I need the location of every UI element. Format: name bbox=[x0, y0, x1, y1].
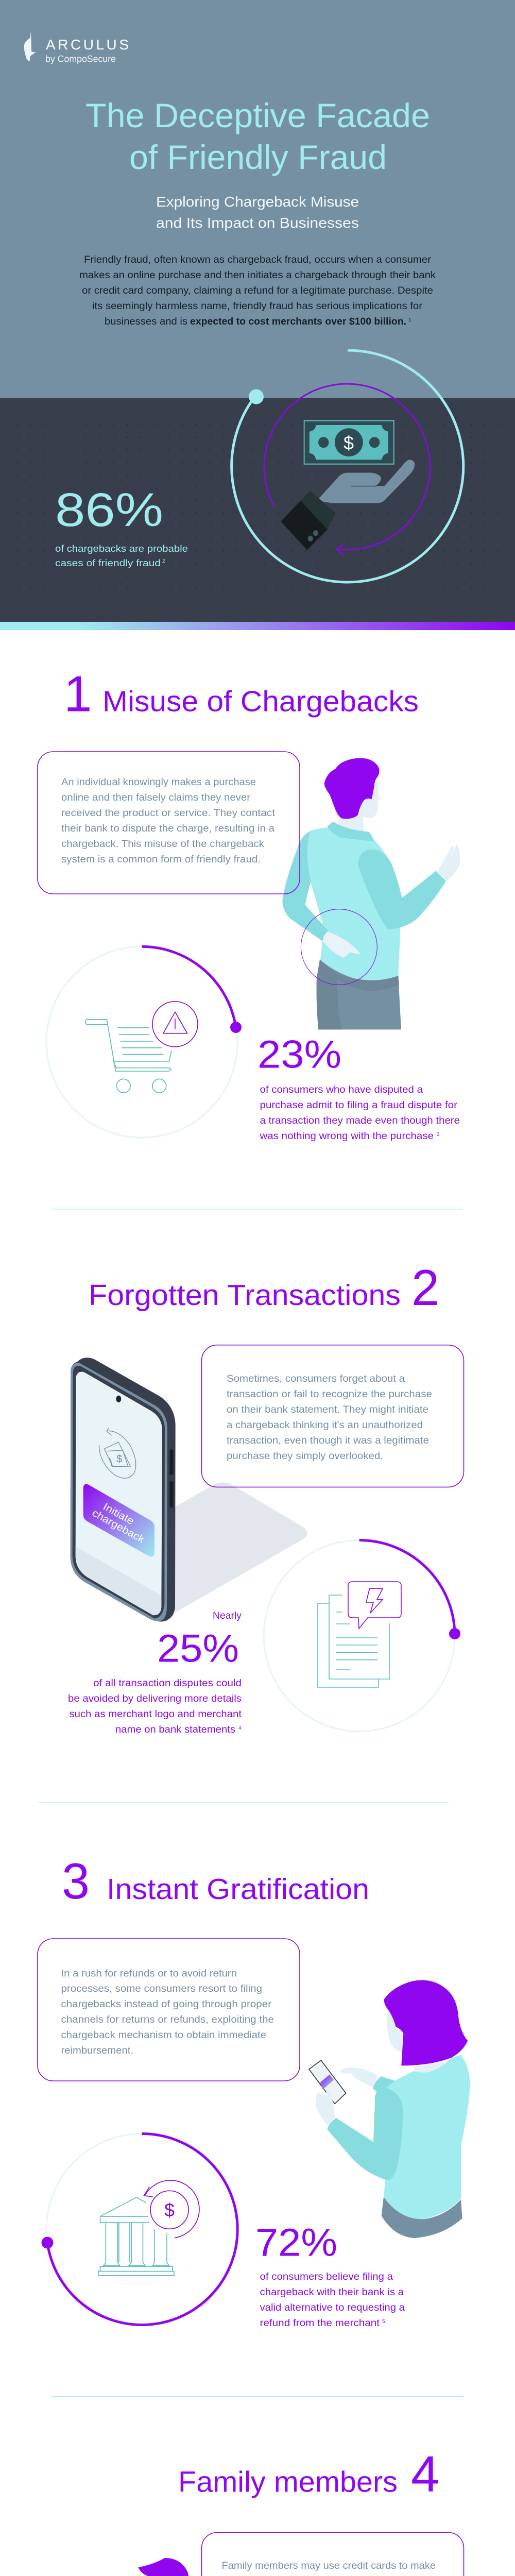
stat: 86%: 86% bbox=[55, 484, 163, 536]
intro text block: businesses and is bbox=[105, 316, 187, 327]
stat: 23%: purchase admit to filing a fraud dispute for bbox=[260, 1100, 458, 1111]
divider bbox=[52, 2396, 463, 2397]
panel: misuse of chargebacks text box: their bank to dispute the charge, resulting in a bbox=[61, 823, 274, 834]
section 3 heading: Instant Gratification bbox=[107, 1873, 369, 1906]
section 2 heading: Forgotten Transactions bbox=[89, 1279, 401, 1312]
subtitle: Exploring Chargeback Misuse bbox=[156, 194, 359, 210]
stat: 72%: 5 bbox=[382, 2319, 385, 2325]
stat: 72%: refund from the merchant bbox=[260, 2318, 380, 2329]
panel: forgotten transactions text box: Sometimes, consumers forget about a bbox=[227, 1374, 405, 1384]
illustration: boy sitting with phone bbox=[90, 2558, 245, 2576]
stat: nearly 25%: 25% bbox=[157, 1627, 239, 1670]
stat: nearly 25%: name on bank statements bbox=[115, 1724, 235, 1735]
stat: 23%: 3 bbox=[437, 1132, 440, 1138]
panel: instant gratification text box: chargebacks instead of going through proper bbox=[61, 1999, 272, 2010]
icon: bank with dollar refund in progress ring: $ bbox=[164, 2199, 175, 2221]
section 2 heading bbox=[89, 1259, 439, 1316]
panel: instant gratification text box: chargeback mechanism to obtain immediate bbox=[61, 2030, 266, 2041]
panel: instant gratification text box: In a rush for refunds or to avoid return bbox=[61, 1968, 237, 1979]
illustration: phone with initiate chargeback button bbox=[71, 1358, 307, 1621]
stat: 72%: 72% bbox=[255, 2221, 337, 2265]
title: of Friendly Fraud bbox=[129, 138, 387, 176]
stat: 86%: of chargebacks are probable bbox=[55, 543, 188, 554]
stat: nearly 25%: Nearly bbox=[213, 1611, 242, 1621]
panel: instant gratification text box bbox=[38, 1939, 300, 2081]
panel: misuse of chargebacks text box: system is a common form of friendly fraud. bbox=[61, 854, 261, 865]
panel: misuse of chargebacks text box: online and then falsely claims they never bbox=[61, 792, 251, 803]
icon: bank with dollar refund in progress ring bbox=[41, 2134, 237, 2325]
stat: nearly 25%: be avoided by delivering more details bbox=[68, 1693, 242, 1704]
section 4 heading: 4 bbox=[411, 2446, 439, 2502]
panel: forgotten transactions text box: on their bank statement. They might initiate bbox=[227, 1404, 428, 1415]
panel: forgotten transactions text box: a chargeback thinking it's an unauthorized bbox=[227, 1420, 423, 1431]
stat: 72%: chargeback with their bank is a bbox=[260, 2287, 404, 2298]
stat: nearly 25%: 4 bbox=[238, 1725, 242, 1731]
stat: nearly 25% bbox=[68, 1611, 242, 1735]
intro text block: or credit card company, claiming a refund for a legitimate purchase. Despite bbox=[82, 285, 433, 296]
stat: 86%: 2 bbox=[162, 558, 165, 564]
panel: instant gratification text box: channels for returns or refunds, exploiting the bbox=[61, 2014, 274, 2025]
stat: 72% bbox=[255, 2221, 405, 2329]
panel: forgotten transactions text box bbox=[202, 1345, 464, 1487]
subtitle bbox=[156, 194, 359, 231]
icon: hand holding dollar bill with circular arrows bbox=[232, 350, 464, 582]
divider bbox=[52, 1209, 463, 1210]
panel: misuse of chargebacks text box: chargeback. This misuse of the chargeback bbox=[61, 839, 265, 850]
panel: family members text box: Family members may use credit cards to make bbox=[221, 2561, 436, 2571]
section 2 heading: 2 bbox=[411, 1259, 439, 1316]
panel: forgotten transactions text box: transaction, even though it was a legitimate bbox=[227, 1435, 429, 1446]
panel: instant gratification text box: reimbursement. bbox=[61, 2045, 133, 2056]
panel: forgotten transactions text box: transaction or fail to recognize the purchase bbox=[227, 1389, 432, 1400]
title: The Deceptive Facade bbox=[85, 96, 430, 134]
stat: 23%: was nothing wrong with the purchase bbox=[259, 1131, 434, 1142]
title bbox=[85, 96, 430, 176]
illustration: phone with initiate chargeback button: Initiate bbox=[101, 1501, 136, 1527]
intro text block: 1 bbox=[408, 317, 411, 323]
icon: shopping cart with alert in progress ring bbox=[46, 946, 242, 1138]
intro text block: makes an online purchase and then initiates a chargeback through their bank bbox=[79, 270, 436, 281]
illustration: phone with initiate chargeback button: chargeback bbox=[90, 1507, 147, 1546]
section 1 heading bbox=[64, 666, 419, 722]
stat: 23% bbox=[258, 1032, 460, 1142]
section 4 heading: Family members bbox=[178, 2466, 398, 2499]
illustration: man with fingers crossed behind back bbox=[282, 758, 460, 1029]
panel: instant gratification text box: processes, some consumers resort to filing bbox=[61, 1984, 262, 1994]
logo: Arculus top: by CompoSecure bbox=[45, 54, 116, 64]
illustration: woman using smartphone bbox=[309, 1980, 470, 2238]
stat: 23%: a transaction they made even though there bbox=[260, 1115, 460, 1126]
section 1 heading: 1 bbox=[64, 666, 92, 722]
logo: Arculus top bbox=[24, 31, 129, 64]
stat: 72%: of consumers believe filing a bbox=[260, 2272, 393, 2282]
panel: header background bbox=[0, 0, 515, 398]
stat: 72%: valid alternative to requesting a bbox=[260, 2302, 405, 2313]
intro text block: Friendly fraud, often known as chargeback fraud, occurs when a consumer bbox=[84, 255, 432, 265]
subtitle: and Its Impact on Businesses bbox=[156, 215, 359, 231]
stat: nearly 25%: such as merchant logo and merchant bbox=[69, 1709, 242, 1720]
section 4 heading bbox=[178, 2446, 439, 2502]
panel: family members text box bbox=[202, 2533, 464, 2576]
stat: 86%: cases of friendly fraud bbox=[55, 557, 161, 568]
stat: nearly 25%: of all transaction disputes could bbox=[93, 1678, 242, 1689]
stat: 23%: 23% bbox=[258, 1032, 341, 1077]
illustration: phone with initiate chargeback button: $ bbox=[116, 1453, 122, 1465]
panel: dark statistic band bbox=[0, 398, 515, 630]
panel: misuse of chargebacks text box bbox=[38, 752, 300, 894]
panel: forgotten transactions text box: purchase they simply overlooked. bbox=[227, 1451, 383, 1462]
section 1 heading: Misuse of Chargebacks bbox=[102, 685, 419, 718]
panel: misuse of chargebacks text box: An individual knowingly makes a purchase bbox=[61, 777, 256, 788]
logo: Arculus top: ARCULUS bbox=[46, 37, 129, 53]
intro text block: expected to cost merchants over $100 billion. bbox=[190, 316, 406, 327]
section 3 heading: 3 bbox=[62, 1853, 90, 1909]
panel: misuse of chargebacks text box: received the product or service. They contact bbox=[61, 808, 276, 819]
intro text block bbox=[79, 255, 436, 327]
intro text block: its seemingly harmless name, friendly fraud has serious implications for bbox=[92, 301, 423, 312]
stat: 23%: of consumers who have disputed a bbox=[260, 1084, 423, 1095]
icon: hand holding dollar bill with circular arrows: $ bbox=[344, 432, 354, 453]
stat: 86% bbox=[55, 484, 188, 568]
icon: documents with lightning speech bubble in progress ring bbox=[264, 1540, 460, 1731]
divider bbox=[38, 1802, 449, 1803]
section 3 heading bbox=[62, 1853, 369, 1909]
